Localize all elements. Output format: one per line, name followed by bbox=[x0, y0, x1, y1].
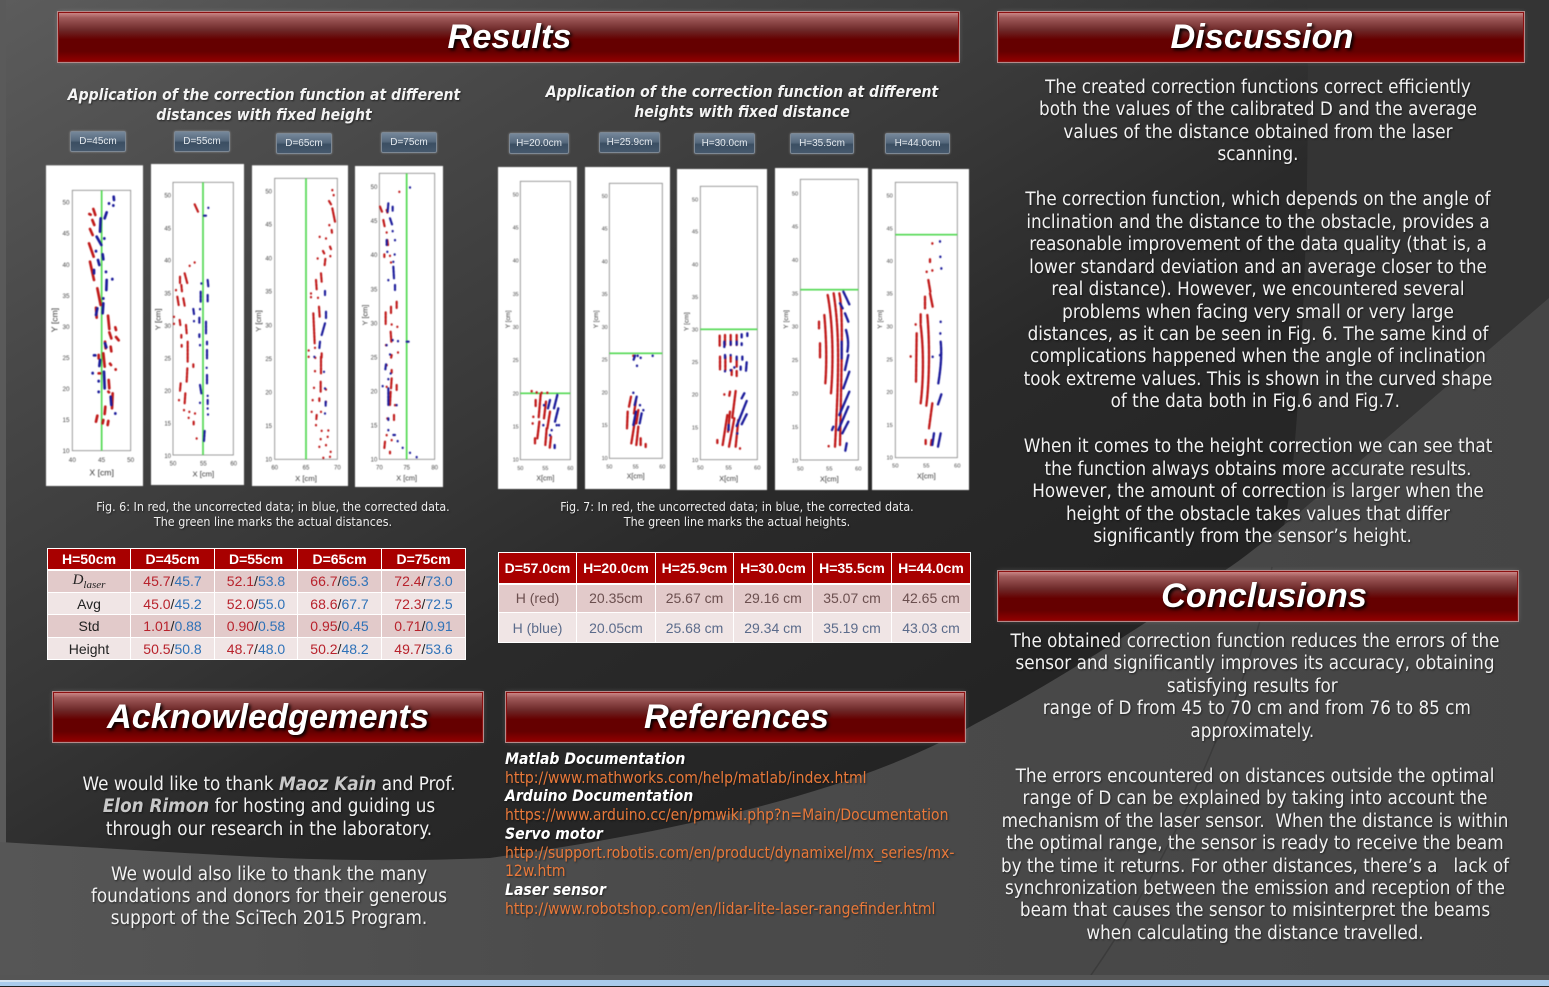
plot D=45cm: 40 bbox=[69, 457, 76, 464]
button D=45cm bbox=[70, 131, 126, 152]
text: discussion: of the data both in Fig.6 and Fig.7. bbox=[1111, 391, 1400, 412]
plot H=44.0cm bbox=[872, 169, 969, 490]
table: distance results: H=50cm bbox=[62, 551, 116, 567]
table: height results: H (red) bbox=[516, 590, 559, 606]
table: distance results: 52.1/53.8 bbox=[227, 573, 285, 589]
plot D=55cm: 30 bbox=[164, 324, 172, 330]
plot H=25.9cm: Y [cm] bbox=[593, 310, 600, 328]
text: references: http://www.robotshop.com/en/lidar-lite-laser-rangefinder.html bbox=[505, 900, 935, 918]
table: distance results: 50.2/48.2 bbox=[310, 640, 369, 656]
scatter plots: height series bbox=[497, 166, 970, 491]
button H=44.0cm bbox=[885, 133, 950, 154]
plot H=20.0cm: 60 bbox=[567, 466, 573, 472]
button D=55cm bbox=[174, 131, 230, 152]
table: height results: 35.07 cm bbox=[823, 590, 881, 606]
table: distance results: D=65cm bbox=[312, 551, 367, 567]
text: acknowledgements: We would also like to thank the many bbox=[111, 864, 427, 885]
plot H=44.0cm: 55 bbox=[923, 464, 929, 470]
table: distance results: 66.7/65.3 bbox=[310, 573, 369, 589]
table: distance results bbox=[47, 548, 466, 660]
plot H=35.5cm: 50 bbox=[797, 466, 803, 472]
button D=75cm: D=75cm bbox=[390, 137, 428, 148]
plot H=44.0cm: 15 bbox=[887, 423, 893, 429]
plot D=55cm: Y [cm] bbox=[154, 309, 163, 330]
plot H=25.9cm: 20 bbox=[602, 390, 608, 396]
plot H=44.0cm: 50 bbox=[887, 193, 893, 199]
scatter plots: distance series bbox=[45, 163, 444, 488]
plot D=45cm: 45 bbox=[98, 457, 106, 464]
button H=20.0cm bbox=[509, 133, 569, 154]
heading: Discussion bbox=[998, 12, 1524, 62]
table: height results: 29.34 cm bbox=[744, 620, 802, 636]
table: distance results: 1.01/0.88 bbox=[143, 618, 202, 634]
table: distance results: 72.3/72.5 bbox=[394, 596, 453, 612]
plot D=55cm: X [cm] bbox=[192, 469, 214, 478]
button H=20.0cm: H=20.0cm bbox=[516, 138, 562, 149]
plot H=30.0cm: 20 bbox=[692, 393, 698, 399]
plot H=44.0cm: 25 bbox=[887, 357, 893, 363]
plot H=44.0cm: 30 bbox=[887, 324, 893, 330]
plot H=35.5cm: 55 bbox=[826, 466, 832, 472]
plot D=65cm: 50 bbox=[265, 189, 273, 195]
plot H=25.9cm: 35 bbox=[602, 292, 608, 298]
button H=25.9cm bbox=[599, 132, 660, 153]
text: conclusions bbox=[1001, 631, 1510, 944]
plot H=35.5cm: X[cm] bbox=[820, 474, 839, 483]
plot H=30.0cm: 35 bbox=[692, 295, 698, 301]
plot D=65cm: 60 bbox=[271, 466, 279, 472]
text: discussion: The correction function, which depends on the angle of bbox=[1025, 189, 1491, 210]
plot D=55cm bbox=[151, 164, 244, 485]
plot H=44.0cm: 45 bbox=[887, 226, 893, 232]
plot H=30.0cm: 55 bbox=[726, 466, 732, 472]
subheading: heights experiment: heights with fixed distance bbox=[634, 103, 850, 121]
text: discussion: the function always obtains more accurate results. bbox=[1045, 459, 1471, 480]
plot D=55cm: 25 bbox=[164, 356, 172, 362]
plot D=55cm: 45 bbox=[164, 226, 172, 232]
table: distance results: 52.0/55.0 bbox=[227, 596, 285, 612]
table: distance results: 72.4/73.0 bbox=[394, 573, 453, 589]
text: references: Laser sensor bbox=[505, 881, 606, 899]
plot D=75cm: 30 bbox=[371, 321, 378, 327]
plot H=35.5cm: 40 bbox=[792, 258, 798, 264]
plot H=30.0cm: 10 bbox=[692, 458, 698, 464]
caption: Fig. 6: The green line marks the actual distances. bbox=[154, 514, 392, 529]
plot H=20.0cm: 45 bbox=[513, 226, 519, 232]
plot D=55cm: 20 bbox=[164, 389, 172, 395]
text: discussion: However, the amount of correction is larger when the bbox=[1032, 481, 1484, 502]
text: conclusions: beam that causes the sensor to misinterpret the beams bbox=[1020, 900, 1490, 921]
table: height results: 43.03 cm bbox=[902, 620, 960, 636]
text: conclusions: range of D can be explained by taking into account the bbox=[1023, 788, 1487, 809]
plot H=20.0cm: 40 bbox=[513, 259, 519, 265]
plot D=75cm: 35 bbox=[371, 287, 378, 293]
text: discussion: height of the obstacle takes values that differ bbox=[1066, 504, 1450, 525]
plot D=65cm: 35 bbox=[265, 290, 273, 296]
text: acknowledgements: support of the SciTech 2015 Program. bbox=[111, 908, 427, 929]
text: discussion: problems when facing very small or very large bbox=[1062, 302, 1454, 323]
plot H=25.9cm: 15 bbox=[602, 423, 608, 429]
button H=30.0cm bbox=[694, 133, 755, 154]
text: discussion: When it comes to the height correction we can see that bbox=[1024, 436, 1492, 457]
text: acknowledgements: through our research in the laboratory. bbox=[106, 819, 432, 840]
plot H=35.5cm: Y [cm] bbox=[783, 310, 790, 329]
plot H=30.0cm: 15 bbox=[692, 425, 698, 431]
plot D=65cm: 15 bbox=[265, 424, 273, 430]
heading: Results bbox=[58, 12, 959, 62]
button D=75cm bbox=[381, 132, 437, 153]
text: discussion: scanning. bbox=[1218, 144, 1298, 165]
plot D=65cm: 70 bbox=[334, 466, 341, 472]
table: height results: 20.05cm bbox=[589, 620, 643, 636]
text: conclusions: The errors encountered on distances outside the optimal bbox=[1016, 766, 1494, 787]
plot H=30.0cm: 40 bbox=[692, 262, 698, 268]
text: references: http://www.mathworks.com/help/matlab/index.html bbox=[505, 769, 867, 787]
table: height results: H=20.0cm bbox=[583, 560, 649, 576]
heading: Conclusions bbox=[998, 571, 1518, 621]
plot H=25.9cm: 40 bbox=[602, 259, 608, 265]
text: discussion: inclination and the distance to the obstacle, provides a bbox=[1026, 212, 1490, 233]
plot D=55cm: 50 bbox=[164, 194, 172, 200]
plot H=35.5cm: 25 bbox=[792, 358, 798, 364]
text: references: Servo motor bbox=[505, 825, 603, 843]
plot D=75cm bbox=[355, 166, 443, 487]
plot H=30.0cm: 25 bbox=[692, 360, 698, 366]
table: height results: H (blue) bbox=[513, 620, 562, 636]
subheading: distances experiment: distances with fixed height bbox=[156, 106, 372, 124]
text: conclusions: synchronization between the emission and reception of the bbox=[1005, 878, 1505, 899]
plot H=20.0cm: 30 bbox=[513, 325, 519, 331]
table: distance results: D=55cm bbox=[229, 551, 283, 567]
plot D=65cm: 45 bbox=[265, 223, 273, 229]
text: discussion: lower standard deviation and an average closer to the bbox=[1029, 257, 1487, 278]
plot D=45cm: 45 bbox=[62, 231, 70, 238]
text: acknowledgements: Elon Rimon for hosting and guiding us bbox=[103, 796, 435, 817]
text: references: https://www.arduino.cc/en/pmwiki.php?n=Main/Documentation bbox=[505, 806, 949, 824]
heading: Acknowledgements: Acknowledgements bbox=[107, 698, 429, 736]
plot H=20.0cm: 35 bbox=[513, 292, 519, 298]
table: distance results: 0.90/0.58 bbox=[227, 618, 285, 634]
table: distance results: 68.6/67.7 bbox=[310, 596, 369, 612]
table: height results: H=30.0cm bbox=[740, 560, 806, 576]
caption: Fig. 7: Fig. 7: In red, the uncorrected data; in blue, the corrected data. bbox=[560, 499, 914, 514]
plot H=44.0cm: 50 bbox=[892, 464, 898, 470]
text: conclusions: satisfying results for bbox=[1167, 676, 1338, 697]
plot H=25.9cm: 55 bbox=[633, 464, 639, 470]
table: height results: H=44.0cm bbox=[898, 560, 964, 576]
plot H=35.5cm: 35 bbox=[792, 291, 798, 297]
plot H=35.5cm bbox=[775, 168, 868, 490]
button D=45cm: D=45cm bbox=[79, 136, 117, 147]
plot H=30.0cm: X[cm] bbox=[719, 474, 738, 483]
plot D=75cm: 80 bbox=[431, 466, 439, 472]
text: discussion: significantly from the sensor’s height. bbox=[1093, 526, 1412, 547]
plot D=45cm: 30 bbox=[62, 324, 70, 331]
table: distance results: Dlaser bbox=[73, 572, 105, 591]
subheading: heights experiment bbox=[544, 83, 940, 122]
button H=35.5cm: H=35.5cm bbox=[799, 138, 845, 149]
text: acknowledgements: We would like to thank Maoz Kain and Prof. bbox=[83, 774, 455, 795]
plot H=25.9cm: 25 bbox=[602, 358, 608, 364]
table: height results: 29.16 cm bbox=[744, 590, 802, 606]
table: distance results: 49.7/53.6 bbox=[394, 640, 453, 656]
button H=35.5cm bbox=[790, 133, 854, 154]
plot H=30.0cm: 50 bbox=[692, 197, 698, 203]
plot D=45cm bbox=[46, 165, 143, 486]
plot H=20.0cm: 15 bbox=[513, 424, 519, 430]
plot D=65cm: 20 bbox=[265, 390, 273, 396]
subheading: heights experiment: Application of the correction function at different bbox=[546, 83, 938, 101]
table: distance results: 48.7/48.0 bbox=[227, 640, 285, 656]
plot D=65cm bbox=[252, 165, 348, 486]
text: conclusions: when calculating the distance travelled. bbox=[1086, 923, 1424, 944]
plot H=35.5cm: 60 bbox=[855, 466, 861, 472]
plot H=20.0cm: 20 bbox=[513, 391, 519, 397]
plot H=30.0cm: 30 bbox=[692, 328, 698, 334]
plot D=55cm: 15 bbox=[164, 421, 172, 427]
plot D=45cm: 40 bbox=[62, 262, 70, 269]
button H=25.9cm: H=25.9cm bbox=[607, 137, 652, 148]
plot D=65cm: 65 bbox=[303, 466, 310, 472]
plot H=20.0cm: 10 bbox=[513, 458, 519, 464]
label buttons: distances bbox=[69, 130, 438, 155]
text: references bbox=[504, 750, 955, 919]
heading: References bbox=[506, 692, 965, 742]
plot D=75cm: 40 bbox=[371, 253, 378, 259]
plot H=20.0cm: 55 bbox=[542, 466, 548, 472]
plot D=65cm: 40 bbox=[265, 256, 273, 262]
plot H=25.9cm: 60 bbox=[659, 464, 665, 470]
plot H=30.0cm: 45 bbox=[692, 230, 698, 236]
plot D=75cm: 10 bbox=[371, 457, 378, 463]
plot D=55cm: 50 bbox=[170, 461, 177, 467]
caption: Fig. 6 bbox=[96, 499, 450, 530]
plot D=65cm: 10 bbox=[265, 457, 273, 463]
table: distance results: D=75cm bbox=[396, 551, 451, 567]
plot H=44.0cm: 10 bbox=[887, 456, 893, 462]
plot D=75cm: 15 bbox=[371, 423, 378, 429]
plot H=35.5cm: 45 bbox=[792, 225, 798, 231]
table: height results: H=35.5cm bbox=[819, 560, 885, 576]
plot D=55cm: 55 bbox=[200, 461, 207, 467]
plot D=45cm: 50 bbox=[62, 200, 70, 207]
text: discussion: complications happened when the angle of inclination bbox=[1030, 346, 1486, 367]
button H=30.0cm: H=30.0cm bbox=[702, 138, 747, 149]
plot H=25.9cm: 45 bbox=[602, 227, 608, 233]
text: references: Arduino Documentation bbox=[505, 787, 693, 805]
subheading: distances experiment: Application of the correction function at different bbox=[68, 86, 460, 104]
text: conclusions: approximately. bbox=[1190, 721, 1314, 742]
text: references: http://support.robotis.com/en/product/dynamixel/mx_series/mx- bbox=[505, 844, 954, 862]
text: conclusions: sensor and significantly improves its accuracy, obtaining bbox=[1015, 653, 1495, 674]
plot H=25.9cm: 50 bbox=[606, 464, 612, 470]
plot D=45cm: X [cm] bbox=[89, 468, 114, 478]
plot D=65cm: 30 bbox=[265, 323, 273, 329]
plot H=30.0cm: 60 bbox=[754, 466, 760, 472]
text: conclusions: by the time it returns. For other distances, there’s a lack of bbox=[1001, 856, 1509, 877]
text: references: Matlab Documentation bbox=[505, 750, 685, 768]
plot H=35.5cm: 20 bbox=[792, 391, 798, 397]
plot H=35.5cm: 10 bbox=[792, 458, 798, 464]
plot H=44.0cm: 20 bbox=[887, 390, 893, 396]
table: distance results: 0.71/0.91 bbox=[394, 618, 453, 634]
plot D=65cm: X [cm] bbox=[295, 474, 317, 483]
plot D=75cm: 75 bbox=[403, 466, 411, 472]
plot H=20.0cm: 50 bbox=[513, 193, 519, 199]
plot H=30.0cm: Y [cm] bbox=[684, 312, 691, 331]
plot D=55cm: 40 bbox=[164, 259, 172, 265]
table: height results: 42.65 cm bbox=[902, 590, 960, 606]
plot H=35.5cm: 30 bbox=[792, 324, 798, 330]
text: conclusions: the optimal range, the sensor is ready to receive the beam bbox=[1006, 833, 1504, 854]
text: acknowledgements bbox=[83, 774, 455, 930]
plot D=55cm: 10 bbox=[164, 454, 172, 460]
table: height results: H=25.9cm bbox=[662, 560, 727, 576]
plot H=20.0cm bbox=[498, 167, 577, 489]
plot H=25.9cm: X[cm] bbox=[627, 474, 645, 481]
table: height results: 20.35cm bbox=[589, 590, 643, 606]
plot D=45cm: Y [cm] bbox=[49, 308, 59, 332]
table: distance results: 50.5/50.8 bbox=[143, 640, 202, 656]
heading: Discussion: Discussion bbox=[1170, 18, 1353, 56]
plot D=55cm: 35 bbox=[164, 291, 172, 297]
label buttons: heights bbox=[508, 131, 951, 155]
table: height results: 25.67 cm bbox=[666, 590, 723, 606]
plot H=25.9cm: 10 bbox=[602, 456, 608, 462]
plot D=65cm: Y [cm] bbox=[254, 310, 263, 332]
table: height results: 35.19 cm bbox=[823, 620, 881, 636]
caption: Fig. 7 bbox=[560, 499, 914, 530]
button D=55cm: D=55cm bbox=[183, 136, 221, 147]
table: height results bbox=[498, 552, 971, 643]
caption: Fig. 7: The green line marks the actual heights. bbox=[624, 514, 850, 529]
text: discussion: reasonable improvement of the data quality (that is, a bbox=[1029, 234, 1487, 255]
heading: Results: Results bbox=[448, 18, 571, 56]
table: distance results: Avg bbox=[77, 596, 101, 612]
heading: Conclusions: Conclusions bbox=[1161, 577, 1367, 615]
plot H=44.0cm: Y [cm] bbox=[877, 310, 884, 329]
button D=65cm: D=65cm bbox=[285, 138, 323, 149]
plot H=25.9cm bbox=[585, 167, 670, 489]
table: distance results: Height bbox=[69, 640, 109, 656]
plot D=75cm: 25 bbox=[371, 355, 378, 361]
plot D=45cm: 50 bbox=[127, 457, 135, 464]
plot D=65cm: 25 bbox=[265, 357, 273, 363]
plot D=75cm: 70 bbox=[376, 466, 383, 472]
plot H=20.0cm: 25 bbox=[513, 358, 519, 364]
text: conclusions: The obtained correction function reduces the errors of the bbox=[1011, 631, 1499, 652]
text: discussion: both the values of the calibrated D and the average bbox=[1039, 99, 1477, 120]
plot D=75cm: Y [cm] bbox=[361, 305, 370, 325]
plot H=44.0cm: 60 bbox=[954, 464, 960, 470]
table: distance results: D=45cm bbox=[145, 551, 200, 567]
subheading: distances experiment bbox=[66, 86, 462, 125]
plot D=75cm: 50 bbox=[371, 185, 378, 191]
text: discussion: took extreme values. This is shown in the curved shape bbox=[1024, 369, 1492, 390]
plot H=25.9cm: 30 bbox=[602, 325, 608, 331]
heading: Acknowledgements bbox=[53, 692, 483, 742]
table: distance results: 0.95/0.45 bbox=[310, 618, 369, 634]
heading: References: References bbox=[644, 698, 829, 736]
plot H=35.5cm: 50 bbox=[792, 191, 798, 197]
plot D=45cm: 35 bbox=[62, 293, 70, 300]
text: discussion: values of the distance obtained from the laser bbox=[1063, 122, 1453, 143]
text: conclusions: mechanism of the laser sensor. When the distance is within bbox=[1002, 811, 1508, 832]
text: references: 12w.htm bbox=[505, 862, 566, 880]
plot H=25.9cm: 50 bbox=[602, 194, 608, 200]
table: height results: D=57.0cm bbox=[505, 560, 570, 576]
plot H=44.0cm: 40 bbox=[887, 259, 893, 265]
table: height results: 25.68 cm bbox=[666, 620, 723, 636]
plot D=45cm: 25 bbox=[62, 355, 70, 362]
button H=44.0cm: H=44.0cm bbox=[895, 138, 940, 149]
plot H=35.5cm: 15 bbox=[792, 425, 798, 431]
plot D=45cm: 15 bbox=[62, 417, 70, 424]
text: discussion: real distance). However, we encountered several bbox=[1051, 279, 1465, 300]
caption: Fig. 6: Fig. 6: In red, the uncorrected data; in blue, the corrected data. bbox=[96, 499, 450, 514]
text: discussion bbox=[1024, 77, 1493, 548]
plot H=20.0cm: X[cm] bbox=[536, 476, 554, 483]
text: acknowledgements: foundations and donors for their generous bbox=[91, 886, 447, 907]
table: distance results: 45.0/45.2 bbox=[143, 596, 202, 612]
text: discussion: The created correction functions correct efficiently bbox=[1045, 77, 1471, 98]
plot D=75cm: 20 bbox=[371, 389, 378, 395]
button D=65cm bbox=[276, 133, 332, 154]
plot H=30.0cm bbox=[677, 169, 767, 490]
plot D=45cm: 10 bbox=[62, 448, 70, 455]
plot H=44.0cm: X[cm] bbox=[917, 472, 936, 481]
plot D=75cm: X [cm] bbox=[396, 474, 417, 483]
table: distance results: Std bbox=[78, 618, 100, 634]
text: conclusions: range of D from 45 to 70 cm and from 76 to 85 cm bbox=[1043, 698, 1471, 719]
table: distance results: 45.7/45.7 bbox=[143, 573, 202, 589]
plot H=30.0cm: 50 bbox=[697, 466, 703, 472]
plot H=20.0cm: Y [cm] bbox=[505, 310, 512, 328]
plot D=75cm: 45 bbox=[371, 219, 378, 225]
plot D=55cm: 60 bbox=[230, 461, 238, 467]
plot D=45cm: 20 bbox=[62, 386, 70, 393]
plot H=20.0cm: 50 bbox=[517, 466, 523, 472]
plot H=44.0cm: 35 bbox=[887, 292, 893, 298]
text: discussion: distances, as it can be seen in Fig. 6. The same kind of bbox=[1028, 324, 1488, 345]
